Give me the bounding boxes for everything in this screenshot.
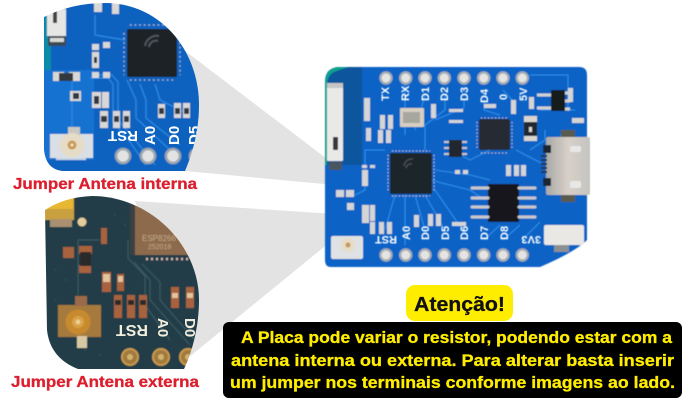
heading badge: Atenção [406,285,513,321]
silkscreen pin labels: A0 [401,226,413,240]
switch [47,9,66,36]
small SOT chip [449,140,462,157]
silkscreen pin labels: D1 [420,87,432,101]
silkscreen pin labels: RST [375,233,397,245]
components [63,228,194,318]
U.FL connector [58,305,101,337]
label: external antenna: Jumper Antena externa [11,374,199,391]
silkscreen pin labels: D4 [479,88,491,103]
photo: external antenna jumper close-up: ESP8266 [142,234,176,243]
silkscreen pin labels: D8 [499,226,511,240]
silkscreen pin labels: TX [380,86,392,101]
silkscreen labels: D5 [186,126,203,145]
silkscreen pin labels: D6 [459,226,471,240]
pads [116,149,204,163]
silkscreen labels [116,318,198,338]
silkscreen pin labels: D3 [459,87,471,101]
silkscreen pin labels: 3V3 [521,233,541,245]
notice box: A Placa pode variar o resistor, podendo estar com a [241,328,673,347]
silkscreen labels [108,126,203,145]
CH340 chip [479,119,510,150]
crystal [400,108,424,127]
silkscreen pin labels: 5V [518,87,530,101]
silkscreen pin labels: 0 [498,94,510,100]
silkscreen labels: RST [108,127,138,144]
SOIC chip near bottom [488,184,519,222]
board: Wemos D1 mini [325,67,590,267]
heading badge: Atenção: Atenção! [414,294,505,316]
chip [127,29,177,77]
passive components [336,88,584,234]
silkscreen pin labels: D5 [440,226,452,240]
notice box: um jumper nos terminais conforme imagens ao lado. [230,373,675,392]
bottom header pads [380,249,528,261]
pads [122,349,196,365]
diode [524,116,537,141]
notice box [223,322,682,398]
notice box: antena interna ou externa. Para alterar basta inserir [231,351,674,370]
ESP8266 chip [390,153,432,194]
silkscreen pin labels [375,85,541,245]
photo: external antenna jumper close-up: 252018 [148,244,171,251]
U.FL connector [50,134,93,158]
silkscreen pin labels: D7 [479,226,491,240]
voltage regulator [551,90,565,111]
silkscreen pin labels: RX [400,85,412,101]
silkscreen labels: A0 [142,126,159,145]
label: internal antenna: Jumper Antena interna [13,176,197,193]
silkscreen pin labels: D2 [439,87,451,101]
photo: external antenna jumper close-up [45,196,199,369]
traces [355,75,575,245]
micro USB connector [546,137,590,195]
silkscreen labels: D0 [181,318,198,337]
antenna connector [331,236,363,259]
silkscreen labels: D0 [166,126,183,145]
silkscreen labels: A0 [154,318,171,337]
silkscreen pin labels: D0 [420,226,432,240]
small components [53,0,190,128]
silkscreen labels: RST [116,321,148,338]
callout wedge: external antenna to board [135,201,335,358]
callout wedge: internal antenna to board [180,47,335,185]
top header pads [380,72,528,84]
photo: internal antenna jumper close-up [40,0,205,175]
switch on left edge [327,83,343,161]
reset button [544,225,584,245]
